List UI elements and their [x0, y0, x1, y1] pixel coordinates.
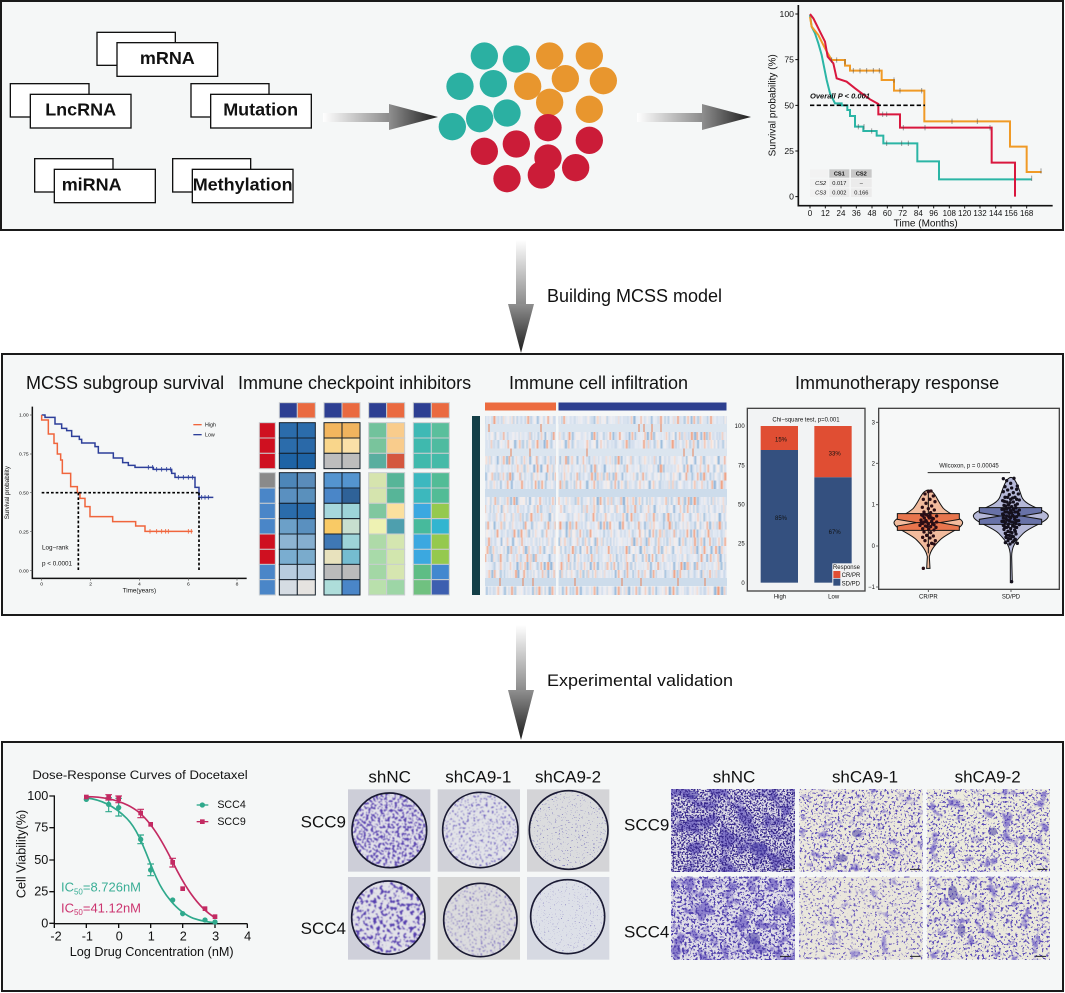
curve: CS1 red	[810, 14, 1015, 197]
dish: SCC9 shCA9-2	[527, 789, 609, 872]
heatmap block 1	[279, 423, 315, 595]
column annotations	[279, 403, 449, 418]
pairwise p table: CS2	[856, 172, 867, 178]
y axis ticks	[780, 9, 794, 202]
row label: SCC9: SCC9	[301, 812, 346, 831]
image: SCC9 shNC	[671, 789, 795, 872]
y axis ticks: 0.25	[19, 529, 29, 535]
label: Experimental validation: Experimental validation	[547, 671, 733, 690]
group gap	[556, 416, 558, 595]
arrow: building model	[508, 240, 534, 353]
wilcoxon bracket: Wilcoxon, p = 0.00045	[939, 464, 999, 470]
column labels: shCA9-1	[445, 767, 511, 786]
IC50 SCC9: IC	[61, 900, 74, 915]
dish: SCC4 shCA9-1	[438, 877, 520, 960]
image: SCC9 shCA9-2	[927, 789, 1050, 872]
x axis ticks: -2	[50, 930, 62, 944]
IC50 SCC4: 50	[74, 887, 83, 896]
y axis ticks	[27, 789, 48, 930]
row label: SCC9: SCC9	[624, 816, 669, 835]
group bar: Low	[558, 402, 726, 410]
y axis ticks: 0	[789, 192, 794, 202]
x axis ticks: 24	[837, 209, 846, 218]
y axis ticks: 75	[738, 464, 745, 470]
y axis ticks: 25	[784, 146, 794, 156]
bar: High	[761, 426, 798, 583]
dish: SCC9 shCA9-1	[438, 789, 520, 872]
curve: SCC9	[84, 795, 217, 919]
heading: Immunotherapy response: Immunotherapy response	[795, 373, 999, 393]
box: Methylation: Methylation	[193, 175, 293, 195]
censor marks	[832, 57, 1041, 181]
pairwise p table: CS2	[815, 181, 827, 187]
box: miRNA: miRNA	[62, 175, 122, 195]
pairwise p table: CS1	[834, 172, 845, 178]
heatmap block 3	[369, 423, 405, 595]
scale bars	[780, 869, 1047, 956]
y axis ticks	[868, 420, 876, 591]
pairwise p table: CS3	[815, 191, 827, 197]
y axis ticks: 100	[735, 424, 745, 430]
x axis ticks	[40, 582, 239, 588]
y axis ticks: 1	[872, 503, 876, 509]
curve: CS2 orange	[810, 17, 1042, 172]
image: SCC4 shCA9-2	[927, 877, 1050, 960]
x axis ticks: 144	[989, 209, 1003, 218]
x axis ticks: 8	[236, 582, 239, 588]
label: Building MCSS model: Building MCSS model	[547, 286, 722, 306]
panel: experimental validation	[2, 742, 1063, 991]
percent labels: 67%	[829, 530, 841, 536]
transwell migration assay	[624, 767, 1050, 960]
heading: MCSS subgroup survival: MCSS subgroup survival	[26, 373, 224, 393]
image: SCC9 shCA9-1	[799, 789, 923, 872]
y axis ticks: 100	[27, 789, 48, 803]
column labels: shCA9-2	[535, 767, 601, 786]
jitter points: CR/PR	[920, 491, 937, 568]
chart: response violin plot	[868, 408, 1059, 600]
y axis ticks	[19, 413, 29, 574]
x axis ticks: 4	[138, 582, 141, 588]
y axis title: Survival probability	[4, 465, 11, 519]
x axis labels: SD/PD	[1002, 594, 1021, 600]
log-rank p value: Log−rank	[42, 545, 69, 552]
legend	[832, 563, 862, 588]
pairwise p table: 0.017	[832, 181, 846, 187]
row annotations	[259, 423, 275, 595]
heatmap cells	[485, 416, 727, 595]
x axis title: Time(years)	[123, 588, 156, 595]
column labels	[713, 767, 1021, 786]
y axis ticks: 100	[780, 9, 794, 19]
y axis ticks: 25	[34, 885, 48, 899]
legend: SCC9	[197, 816, 246, 828]
heatmap block 2	[324, 423, 360, 595]
curve: CS3 teal	[810, 15, 1032, 179]
x axis ticks: 120	[958, 209, 972, 218]
curve: SCC4	[84, 797, 218, 925]
x axis title: Log Drug Concentration (nM)	[70, 945, 234, 959]
IC50 SCC9: =41.12nM	[83, 900, 141, 915]
x axis title: Time (Months)	[894, 219, 958, 230]
box: Mutation: Mutation	[223, 100, 298, 120]
x axis ticks: 72	[898, 209, 908, 218]
arrow: experimental validation	[508, 625, 534, 740]
x axis ticks	[50, 930, 251, 944]
x axis ticks: 156	[1004, 209, 1018, 218]
dense cell clumps	[688, 790, 997, 945]
y axis title: Survival probability (%)	[768, 54, 779, 156]
x axis ticks: 168	[1020, 209, 1034, 218]
chart: immune cell infiltration heatmap	[472, 402, 727, 595]
pairwise p table	[810, 169, 872, 197]
overall p value: Overall P < 0.001	[810, 94, 870, 101]
chart title: Dose-Response Curves of Docetaxel	[32, 768, 248, 782]
x axis ticks: 108	[943, 209, 957, 218]
pairwise p table: 0.166	[854, 191, 868, 197]
median reference line	[810, 103, 925, 108]
y axis ticks: 0	[41, 916, 48, 930]
dish: SCC9 shNC	[348, 789, 430, 872]
test label: Chi−square test, p=0.001	[772, 417, 840, 423]
row label: SCC4: SCC4	[301, 919, 346, 938]
image: SCC4 shCA9-1	[799, 877, 923, 960]
x axis labels: Low	[828, 594, 840, 600]
chart: overall survival by subtype	[768, 5, 1053, 230]
y axis title: Cell Viability(%)	[14, 810, 28, 898]
y axis ticks: 0.50	[19, 490, 29, 496]
x axis ticks: 4	[244, 930, 251, 944]
y axis ticks: 0.00	[19, 568, 29, 574]
curve: High	[42, 415, 193, 531]
percent labels: 33%	[829, 451, 841, 457]
x axis ticks: 132	[973, 209, 987, 218]
legend: Low	[205, 433, 215, 439]
x axis ticks: 0	[116, 930, 123, 944]
percent labels: 85%	[775, 516, 788, 522]
pairwise p table: 0.002	[832, 191, 846, 197]
x axis labels	[919, 594, 1021, 600]
y axis ticks: 1.00	[19, 413, 29, 419]
y axis ticks: 2	[872, 461, 876, 467]
orange cluster	[514, 42, 617, 123]
x axis ticks: 36	[852, 209, 861, 218]
legend: CR/PR	[842, 573, 861, 579]
box: Methylation	[173, 159, 293, 203]
column labels: shCA9-1	[832, 767, 898, 786]
jitter points: SD/PD	[1002, 478, 1019, 582]
heatmap block 4	[413, 423, 449, 595]
y axis ticks: 50	[738, 503, 745, 509]
x axis ticks: 2	[89, 582, 92, 588]
chart: immune checkpoint heatmap	[259, 403, 449, 595]
y axis ticks: 0	[872, 544, 876, 550]
heading: Immune cell infiltration: Immune cell infiltration	[509, 373, 688, 393]
box: LncRNA	[10, 84, 131, 128]
legend: SCC4: SCC4	[217, 799, 246, 811]
y axis ticks: 3	[872, 420, 876, 426]
image: SCC4 shNC	[671, 877, 795, 960]
legend	[193, 423, 216, 439]
x axis ticks: -1	[82, 930, 93, 944]
violin: SD/PD	[973, 477, 1048, 583]
dish: SCC4 shNC	[348, 877, 430, 960]
pairwise p table: –	[860, 181, 864, 187]
y axis ticks: 75	[784, 55, 794, 65]
box: mRNA: mRNA	[140, 48, 195, 68]
column labels: shNC	[713, 767, 755, 786]
x axis labels: CR/PR	[919, 594, 938, 600]
legend: SCC4	[197, 799, 246, 811]
x axis ticks: 84	[914, 209, 923, 218]
x axis ticks: 2	[180, 930, 187, 944]
arrow: omics to clusters	[323, 104, 438, 130]
box: Mutation	[191, 84, 311, 128]
x axis ticks: 60	[883, 209, 892, 218]
y axis ticks: 50	[784, 100, 794, 110]
x axis ticks: 96	[929, 209, 939, 218]
legend: Response	[833, 565, 861, 571]
column labels	[368, 767, 601, 786]
wilcoxon bracket	[928, 464, 1010, 473]
violin: CR/PR	[894, 490, 963, 568]
IC50 SCC9: 50	[74, 908, 83, 917]
cluster side bar	[472, 416, 480, 595]
y axis ticks: 0	[741, 581, 745, 587]
colony formation assay	[301, 767, 609, 960]
chart: response stacked bars	[735, 408, 865, 600]
bar: Low	[814, 426, 852, 583]
red cluster	[471, 114, 603, 192]
panel: multi-omics clustering	[1, 1, 1063, 230]
x axis ticks: 6	[187, 582, 190, 588]
panel: MCSS model analyses	[2, 354, 1063, 615]
arrow: clusters to survival	[637, 104, 751, 130]
clustered samples	[439, 42, 617, 192]
legend: SCC9: SCC9	[217, 816, 246, 828]
IC50 SCC4: =8.726nM	[83, 880, 141, 895]
censor marks	[148, 465, 208, 500]
x axis ticks: 1	[148, 930, 155, 944]
x axis ticks: 48	[868, 209, 877, 218]
legend: SD/PD	[842, 582, 861, 588]
median reference lines	[42, 493, 199, 571]
x axis labels: High	[774, 594, 786, 600]
y axis ticks	[735, 424, 745, 587]
box: mRNA	[97, 32, 218, 76]
omics data boxes	[10, 32, 311, 203]
column labels: shCA9-2	[955, 767, 1021, 786]
y axis ticks: 75	[34, 821, 48, 835]
chart: MCSS subgroup survival curve	[4, 407, 247, 595]
group bar: High	[485, 402, 556, 410]
x axis ticks: 3	[212, 930, 219, 944]
x axis ticks	[808, 209, 1034, 218]
box: miRNA	[35, 159, 155, 203]
x axis labels	[774, 594, 840, 600]
x axis ticks: 12	[821, 209, 830, 218]
y axis ticks: 0.75	[19, 452, 29, 458]
heading: Immune checkpoint inhibitors: Immune checkpoint inhibitors	[238, 373, 471, 393]
teal cluster	[439, 42, 530, 140]
log-rank p value: p < 0.0001	[42, 561, 73, 568]
legend: High	[205, 423, 216, 429]
percent labels	[775, 438, 841, 536]
log-rank p value	[42, 545, 73, 568]
y axis ticks: −1	[868, 585, 876, 591]
row label: SCC4: SCC4	[624, 922, 669, 941]
chart: dose-response curves	[14, 768, 251, 959]
curve: Low	[42, 415, 213, 497]
percent labels: 15%	[775, 438, 788, 444]
x axis ticks: 0	[40, 582, 43, 588]
IC50 SCC4: IC	[61, 880, 74, 895]
x axis ticks: 0	[808, 209, 813, 218]
sparse orange marks	[489, 424, 705, 586]
box: LncRNA: LncRNA	[45, 100, 116, 120]
column labels: shNC	[368, 767, 411, 786]
y axis ticks: 50	[34, 853, 48, 867]
dish: SCC4 shCA9-2	[527, 877, 609, 960]
y axis ticks: 25	[738, 542, 745, 548]
